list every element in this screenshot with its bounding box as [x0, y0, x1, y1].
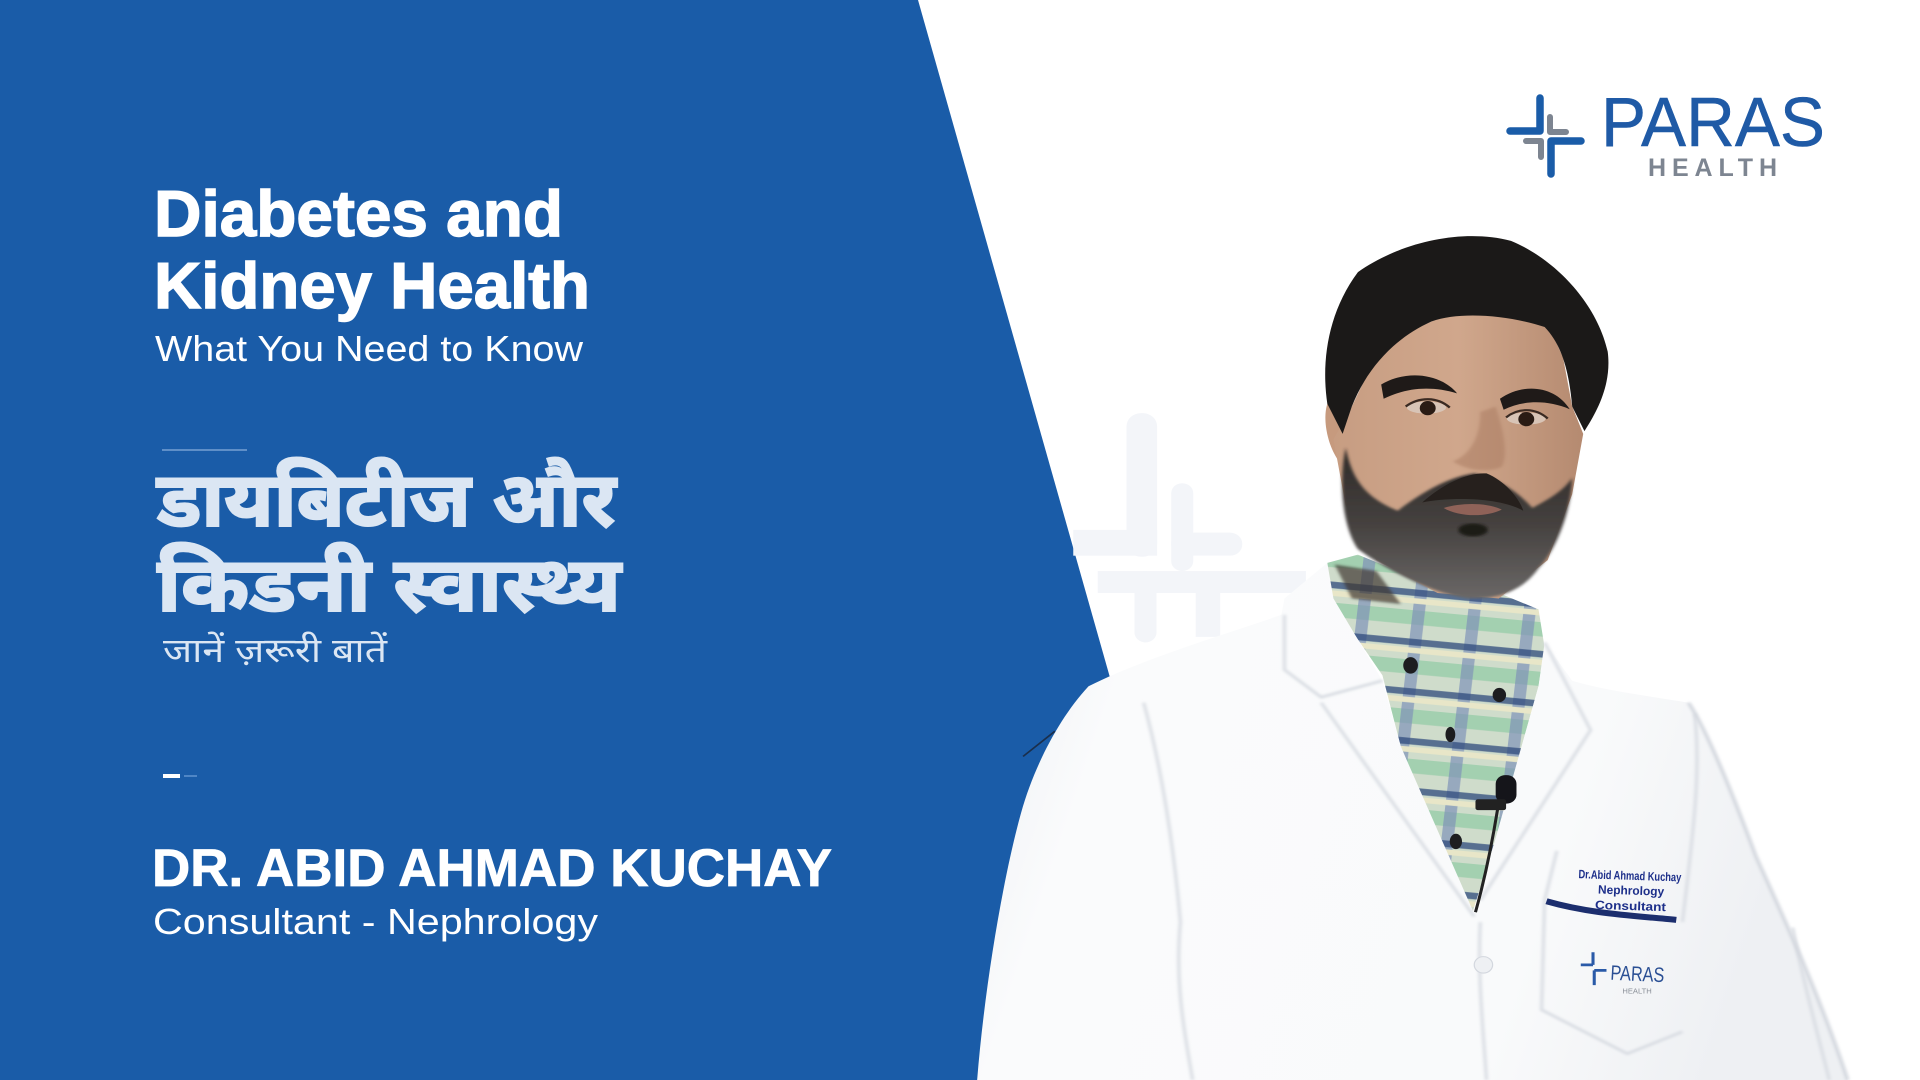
shirt buttons	[1403, 657, 1506, 849]
shirt: plaid	[1326, 555, 1545, 917]
title: Hindi heading: डायबिटीज और	[156, 458, 618, 543]
icon: cross logo mark	[1510, 98, 1581, 174]
pocket logo: PARAS	[1610, 961, 1665, 987]
logo: Paras Health	[1510, 83, 1825, 182]
face	[1333, 313, 1583, 598]
pocket logo: HEALTH	[1622, 987, 1652, 995]
title: Hindi heading	[156, 458, 623, 628]
eyes	[1406, 399, 1548, 426]
neck shadow	[1335, 564, 1401, 604]
illustration: doctor portrait	[977, 236, 1848, 1080]
right edge shading	[1689, 703, 1848, 1080]
title: English heading: Kidney Health	[154, 249, 590, 322]
stray hair stroke on blue	[1023, 731, 1055, 756]
mustache and lips	[1422, 473, 1523, 511]
pocket logo	[1581, 952, 1665, 995]
pocket line	[1546, 901, 1676, 920]
pocket badge text: Consultant	[1595, 898, 1667, 914]
microphone and cable	[1475, 775, 1516, 912]
doctor role: Consultant - Nephrology	[153, 901, 598, 942]
nose shadow	[1453, 406, 1505, 470]
coat buttons	[1474, 957, 1493, 973]
pocket badge text: Nephrology	[1598, 882, 1665, 898]
hair	[1325, 236, 1608, 434]
title: English heading	[154, 177, 590, 322]
doctor name: DR. ABID AHMAD KUCHAY	[152, 839, 832, 898]
panel: blue background	[0, 0, 1224, 1080]
subtitle: English: What You Need to Know	[155, 328, 584, 369]
title: English heading: Diabetes and	[154, 177, 563, 250]
background watermark: pale cross logo	[1073, 413, 1306, 642]
subtitle: Hindi: जानें ज़रूरी बातें	[163, 631, 388, 670]
pocket badge text	[1578, 867, 1682, 914]
collar and lapel shading	[1144, 615, 1829, 1080]
logo wordmark HEALTH: HEALTH	[1648, 154, 1777, 182]
title: Hindi heading: किडनी स्वास्थ्य	[157, 543, 623, 628]
ear	[1325, 404, 1358, 467]
coat: white lab coat body	[977, 563, 1848, 1080]
beard	[1342, 448, 1572, 599]
logo wordmark PARAS: PARAS	[1601, 83, 1825, 161]
divider line above Hindi title	[162, 449, 247, 451]
eyebrows	[1381, 375, 1457, 399]
pocket badge text: Dr.Abid Ahmad Kuchay	[1578, 867, 1682, 884]
head	[1325, 236, 1608, 599]
accent dash	[163, 774, 197, 778]
